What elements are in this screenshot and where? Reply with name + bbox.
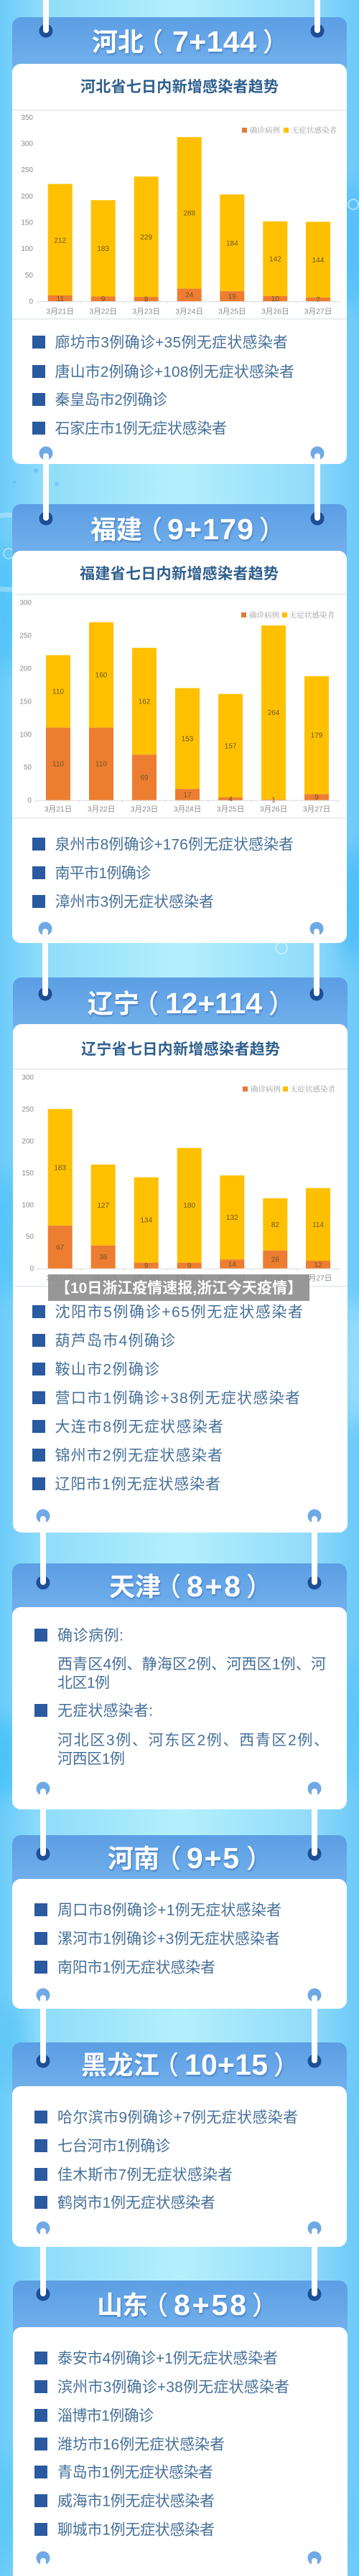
heading: 天津（8+8）: 天津 [109, 1572, 161, 1601]
list item: 唐山: 唐山市2例确诊+108例无症状感染者 [55, 364, 294, 380]
bar: 3月23日: 3月23日 [131, 805, 158, 813]
list item: 青岛: 青岛市1例无症状感染者 [57, 2464, 213, 2481]
y axis labels: 50 [26, 1233, 34, 1241]
bar: 3月24日: 3月24日 [175, 307, 203, 316]
y axis labels [22, 1074, 34, 1273]
hook left [36, 2054, 50, 2068]
white card: 河南 [12, 1879, 347, 2009]
y axis labels: 150 [19, 699, 32, 706]
list item: 滨州: 滨州市3例确诊+38例无症状感染者 [57, 2380, 289, 2395]
bar: 3月21日: 110 [52, 688, 64, 696]
y axis labels [21, 114, 33, 306]
heading: 辽宁（12+114）: 辽宁 [88, 989, 139, 1018]
white card: 福建 [12, 551, 347, 943]
bar: 3月26日 [261, 222, 289, 316]
bar: 3月24日 [174, 688, 201, 813]
heading: 黑龙江（10+15）: ） [274, 2050, 299, 2080]
bar: 3月23日 [132, 176, 160, 316]
y axis labels: 300 [19, 600, 32, 607]
y axis labels: 150 [21, 219, 33, 227]
hook right [307, 2288, 322, 2301]
heading: 山东（8+58）: 山东 [97, 2291, 148, 2320]
bar: 3月22日: 3月22日 [89, 307, 117, 316]
list item: 南阳: 南阳市1例无症状感染者 [57, 1959, 215, 1976]
hole right [307, 2222, 322, 2235]
white card: 山东 [13, 2327, 348, 2576]
heading: 河南（9+5） [108, 1842, 272, 1875]
bar: 3月27日 [304, 1188, 332, 1282]
hook left [36, 2288, 50, 2301]
white card: 天津 [12, 1607, 347, 1809]
hole left [39, 922, 52, 935]
bar: 3月22日: 110 [95, 761, 107, 769]
bar: 3月23日: 3月23日 [132, 307, 160, 316]
y axis labels: 250 [19, 633, 32, 640]
heading: 天津（8+8） [109, 1570, 272, 1603]
bar: 3月25日: 3月25日 [218, 1274, 246, 1282]
bar: 3月24日: 9 [187, 1262, 192, 1270]
text: 无症状详情: 河北区3例、河东区2例、西青区2例、 [57, 1733, 329, 1748]
list item: 辽阳: 辽阳市1例无症状感染者 [55, 1476, 220, 1493]
bar: 3月24日 [175, 1148, 203, 1282]
text: 确诊详情: 西青区4例、静海区2例、河西区1例、河 [57, 1657, 326, 1672]
bar: 3月23日: 9 [144, 1262, 149, 1270]
list item: 佳木斯: 佳木斯市7例无症状感染者 [57, 2167, 233, 2183]
heading: 河南（9+5）: （ [155, 1844, 181, 1873]
heading: 山东（8+58）: ） [252, 2291, 278, 2320]
hook left [39, 987, 52, 1001]
heading: 天津（8+8）: （ [155, 1572, 181, 1601]
bar: 3月24日: 153 [182, 735, 194, 743]
chart title: 辽宁: 辽宁省七日内新增感染者趋势 [81, 1041, 280, 1058]
header band: 辽宁 [13, 977, 348, 1042]
bar: 3月23日: 69 [140, 775, 149, 782]
bar: 3月25日 [218, 194, 246, 316]
bar: 3月26日: 264 [268, 709, 280, 717]
hole right [307, 1509, 322, 1523]
bar: 3月25日: 3月25日 [218, 307, 246, 316]
bar: 3月24日 [175, 137, 203, 316]
heading: 黑龙江（10+15） [81, 2048, 299, 2081]
white card: 黑龙江 [12, 2086, 347, 2247]
bar: 3月26日: 82 [271, 1221, 279, 1229]
list item: 廊坊: 廊坊市3例确诊+35例无症状感染者 [55, 334, 288, 351]
hanging strings [40, 0, 320, 2576]
panel: 辽宁 [13, 977, 348, 1533]
legend [242, 126, 337, 135]
bar: 3月27日: 9 [314, 794, 319, 802]
bar: 3月25日 [217, 694, 244, 813]
bar: 3月21日 [46, 1109, 74, 1282]
bar: 3月24日: 180 [183, 1202, 195, 1210]
list item: 潍坊: 潍坊市16例无症状感染者 [57, 2437, 225, 2453]
header band: 黑龙江 [12, 2042, 347, 2103]
bar: 3月25日: 132 [226, 1214, 238, 1222]
bar: 3月26日: 28 [271, 1256, 279, 1264]
hole left [36, 1988, 50, 2002]
hook left [36, 1847, 50, 1860]
bar: 3月22日 [88, 622, 115, 813]
bar: 3月21日: 3月21日 [46, 307, 74, 316]
heading: 福建（9+179）: 9+179 [167, 513, 253, 546]
header band: 河南 [12, 1835, 347, 1896]
heading: 黑龙江（10+15）: 黑龙江 [81, 2050, 159, 2080]
panel: 河北 [12, 17, 347, 464]
bar: 3月24日: 288 [183, 209, 195, 218]
bar: 3月27日: 3月27日 [304, 1274, 332, 1282]
y axis labels: 200 [21, 193, 33, 201]
y axis labels: 350 [21, 114, 33, 122]
bar: 3月22日: 36 [99, 1254, 108, 1261]
bar chart: 辽宁 [22, 1074, 340, 1282]
hole right [310, 446, 325, 460]
header band: 福建 [12, 504, 347, 569]
heading: 福建（9+179）: （ [136, 515, 162, 544]
y axis labels: 100 [21, 245, 33, 253]
list item: 鹤岗: 鹤岗市1例无症状感染者 [57, 2194, 215, 2212]
bar: 3月27日 [304, 222, 332, 316]
bar: 3月25日: 4 [228, 795, 233, 803]
heading: 黑龙江（10+15）: 10+15 [185, 2048, 268, 2081]
list item: 鞍山: 鞍山市2例确诊 [55, 1361, 159, 1378]
bar chart: 福建 [19, 600, 338, 813]
list item: 无症状感染者: 无症状感染者: [57, 1703, 153, 1720]
bar: 3月22日: 183 [97, 245, 109, 253]
bar: 3月25日 [218, 1175, 246, 1282]
bar: 3月26日: 10 [271, 295, 279, 303]
bar: 3月24日: 24 [185, 292, 194, 300]
bar: 3月25日: 3月25日 [217, 805, 244, 813]
heading: 河北（7+144）: ） [263, 27, 289, 57]
bar: 3月27日: 179 [311, 732, 323, 740]
overlay caption bar [48, 1274, 309, 1301]
list item: 七台河: 七台河市1例确诊 [57, 2139, 170, 2154]
panel: 福建 [12, 504, 347, 943]
hook right [307, 2054, 322, 2068]
bar: 3月27日: 3月27日 [303, 805, 330, 813]
hook right [307, 1847, 322, 1860]
y axis labels: 100 [19, 731, 32, 739]
list item: 威海: 威海市1例无症状感染者 [57, 2493, 215, 2510]
bar: 3月27日: 12 [314, 1261, 322, 1269]
bar: 3月22日: 9 [101, 295, 106, 303]
heading: 河南（9+5）: ） [246, 1844, 272, 1873]
bar: 3月26日: 3月26日 [261, 1274, 289, 1282]
legend: 无症状感染者 [292, 126, 337, 135]
panel: 河南 [12, 1835, 347, 2009]
hole left [39, 446, 53, 460]
bar: 3月24日: 3月24日 [174, 805, 201, 813]
heading: 辽宁（12+114） [88, 987, 294, 1020]
bar: 3月21日: 3月21日 [46, 1274, 74, 1282]
header band: 河北 [12, 17, 347, 82]
list item: 石家庄: 石家庄市1例无症状感染者 [55, 420, 227, 437]
bar: 3月26日 [261, 1198, 289, 1282]
bar: 3月23日 [132, 1178, 160, 1282]
header band: 山东 [13, 2281, 348, 2345]
bar: 3月21日: 183 [54, 1164, 66, 1172]
bar: 3月22日: 160 [95, 672, 108, 680]
hook left [39, 512, 53, 525]
bar: 3月21日 [45, 655, 72, 813]
hole left [36, 2552, 50, 2565]
text: 确诊详情: 北区1例 [57, 1675, 110, 1691]
hole right [307, 2552, 322, 2565]
text: 无症状详情: 河西区1例 [57, 1751, 125, 1767]
list item: 确诊病例: 确诊病例: [57, 1628, 123, 1644]
bar: 3月25日: 184 [226, 240, 238, 247]
text: 无症状详情 [57, 1733, 329, 1767]
heading: 天津（8+8）: ） [246, 1572, 272, 1601]
bar: 3月21日: 11 [57, 295, 64, 303]
bar: 3月27日: 7 [316, 296, 320, 304]
bar: 3月21日: 67 [56, 1244, 65, 1251]
panel: 黑龙江 [12, 2042, 347, 2247]
y axis labels [19, 600, 32, 805]
bar: 3月22日 [89, 1165, 117, 1282]
chart title: 福建: 福建省七日内新增感染者趋势 [80, 565, 279, 582]
bar: 3月27日: 144 [312, 257, 325, 265]
legend [241, 610, 335, 620]
bar: 3月21日: 212 [54, 237, 66, 245]
bar: 3月25日: 14 [228, 1261, 236, 1269]
hole right [310, 922, 323, 935]
heading: 山东（8+58）: 8+58 [174, 2288, 246, 2321]
legend: 确诊病例 [250, 126, 280, 135]
bar: 3月26日: 1 [271, 797, 276, 805]
heading: 山东（8+58）: （ [142, 2291, 168, 2320]
bar: 3月22日 [89, 200, 117, 316]
list item: 漳州: 漳州市3例无症状感染者 [55, 894, 214, 911]
list item: 沈阳: 沈阳市5例确诊+65例无症状感染者 [55, 1304, 303, 1321]
heading: 福建（9+179） [90, 513, 285, 546]
bar: 3月24日: 3月24日 [175, 1274, 203, 1282]
y axis labels: 250 [22, 1106, 34, 1114]
hook left [36, 1576, 50, 1589]
white card: 河北 [12, 64, 347, 464]
panel: 山东 [13, 2281, 348, 2576]
bar: 3月24日: 17 [183, 791, 192, 799]
heading: 辽宁（12+114）: ） [269, 989, 294, 1018]
white card: 辽宁 [13, 1024, 348, 1533]
y axis labels: 50 [24, 764, 32, 772]
hole left [36, 1781, 50, 1796]
heading: 河南（9+5）: 河南 [108, 1844, 159, 1873]
list item: 漯河: 漯河市1例确诊+3例无症状感染者 [57, 1931, 280, 1948]
legend: 确诊病例 [251, 1084, 281, 1094]
bar chart: 河北 [21, 114, 340, 316]
bar: 3月26日 [260, 625, 287, 813]
list item: 泰安: 泰安市4例确诊+1例无症状感染者 [57, 2351, 278, 2367]
list item: 锦州: 锦州市2例无症状感染者 [55, 1447, 223, 1464]
panel: 天津 [12, 1563, 347, 1809]
list item: 聊城: 聊城市1例无症状感染者 [57, 2521, 215, 2539]
header band: 天津 [12, 1563, 347, 1624]
bar: 3月26日: 3月26日 [260, 805, 287, 813]
bar: 3月22日: 3月22日 [89, 1274, 117, 1282]
heading: 辽宁（12+114）: 12+114 [165, 987, 262, 1020]
y axis labels: 300 [22, 1074, 34, 1081]
bar: 3月21日 [46, 184, 74, 316]
heading: 河南（9+5）: 9+5 [187, 1842, 239, 1875]
heading: 河北（7+144） [92, 25, 289, 58]
y axis labels: 150 [22, 1170, 34, 1178]
heading: 黑龙江（10+15）: （ [153, 2050, 179, 2080]
heading: 辽宁（12+114）: （ [133, 989, 159, 1018]
legend: 确诊病例 [249, 610, 279, 620]
hole right [307, 1988, 322, 2002]
bar: 3月23日: 134 [140, 1217, 152, 1225]
list item: 秦皇岛: 秦皇岛市2例确诊 [55, 392, 167, 409]
chart title: 河北: 河北省七日内新增感染者趋势 [80, 78, 279, 95]
bar: 3月22日: 3月22日 [88, 805, 115, 813]
list item: 哈尔滨: 哈尔滨市9例确诊+7例无症状感染者 [57, 2110, 298, 2126]
bar: 3月21日: 110 [52, 761, 64, 769]
bar: 3月23日: 229 [140, 234, 152, 242]
hook right [310, 987, 323, 1001]
hole right [307, 1781, 322, 1796]
list item: 淄博: 淄博市1例确诊 [57, 2408, 154, 2424]
legend [243, 1084, 335, 1094]
bar: 3月25日: 19 [228, 293, 236, 301]
heading: 山东（8+58） [97, 2288, 278, 2321]
bar: 3月22日: 127 [97, 1202, 109, 1210]
list item: 泉州: 泉州市8例确诊+176例无症状感染者 [55, 836, 294, 853]
heading: 天津（8+8）: 8+8 [187, 1570, 241, 1603]
heading: 福建（9+179）: ） [259, 515, 285, 544]
list item: 周口: 周口市8例确诊+1例无症状感染者 [57, 1902, 281, 1919]
bar: 3月25日: 157 [225, 742, 237, 750]
list item: 营口: 营口市1例确诊+38例无症状感染者 [55, 1390, 300, 1407]
hook right [307, 1576, 322, 1589]
y axis labels: 0 [27, 797, 32, 805]
y axis labels: 250 [21, 166, 33, 174]
y axis labels: 50 [25, 272, 33, 280]
y axis labels: 0 [29, 298, 33, 306]
list item: 葫芦岛: 葫芦岛市4例确诊 [55, 1332, 175, 1350]
bar: 3月27日: 3月27日 [304, 307, 332, 316]
hole left [36, 2222, 50, 2235]
y axis labels: 200 [19, 666, 32, 673]
hook right [310, 512, 325, 525]
bar: 3月23日: 8 [144, 295, 149, 304]
overlay caption bar: 【10日浙江疫情速报,浙江今天疫情】 [55, 1279, 302, 1297]
hook left [39, 24, 53, 37]
y axis labels: 200 [22, 1137, 34, 1146]
bar: 3月21日: 3月21日 [45, 805, 72, 813]
heading: 福建（9+179）: 福建 [90, 515, 142, 544]
bar: 3月23日: 162 [139, 698, 151, 706]
bar: 3月26日: 142 [269, 255, 281, 263]
list item: 南平: 南平市1例确诊 [55, 865, 151, 882]
y axis labels: 0 [29, 1265, 34, 1273]
bar: 3月23日 [131, 648, 158, 813]
hole left [36, 1509, 50, 1523]
legend: 无症状感染者 [290, 1084, 335, 1094]
hook right [310, 24, 325, 37]
text: 确诊详情 [57, 1657, 326, 1691]
legend: 无症状感染者 [289, 610, 335, 620]
bar: 3月26日: 3月26日 [261, 307, 289, 316]
bar: 3月27日 [303, 676, 330, 813]
y axis labels: 100 [22, 1201, 34, 1209]
bar: 3月27日: 114 [312, 1221, 324, 1229]
heading: 河北（7+144）: 7+144 [172, 25, 256, 58]
y axis labels: 300 [21, 141, 33, 148]
heading: 河北（7+144）: （ [137, 27, 163, 57]
heading: 河北（7+144）: 河北 [92, 27, 144, 57]
list item: 大连: 大连市8例无症状感染者 [55, 1419, 223, 1436]
bar: 3月23日: 3月23日 [132, 1274, 160, 1282]
